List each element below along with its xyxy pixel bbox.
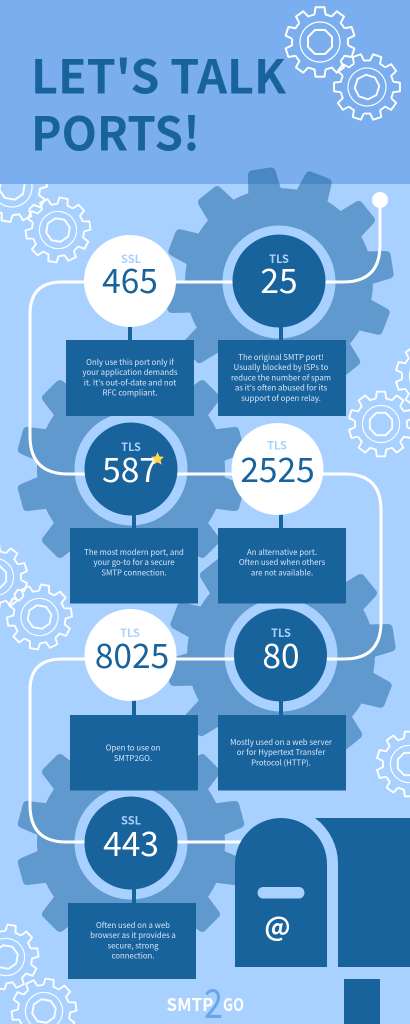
panel: port 25 text: The original SMTP port! [238, 352, 324, 363]
node: port 25 [232, 234, 326, 328]
panel: port 25 text [218, 340, 346, 416]
node: port 443: SSL [121, 812, 141, 828]
icon: small gear bottom left [0, 919, 45, 995]
panel: port 25 text: reduce the number of spam [231, 372, 331, 384]
icon: small gear left edge [0, 544, 29, 610]
node: port 587: 587 [102, 443, 158, 492]
panel: port 443 text: browser as it provides a [90, 930, 176, 941]
route start dot [372, 192, 388, 208]
panel: port 465 text: it. It's out-of-date and not [84, 378, 176, 388]
logo [166, 972, 244, 1024]
node: port 465 [84, 235, 176, 327]
node: port 443 [84, 796, 178, 890]
connector route [30, 200, 381, 842]
panel: port 587 text: SMTP connection. [101, 568, 167, 578]
icon: small gear left upper [19, 192, 97, 268]
mailbox slot [258, 887, 304, 898]
header band [0, 0, 410, 184]
node: port 8025: 8025 [95, 629, 169, 678]
title [31, 40, 287, 164]
icon: header gear two [324, 45, 410, 129]
node: port 587: TLS [121, 439, 141, 455]
stems [128, 325, 283, 904]
mailbox [235, 818, 410, 1024]
node: port 80 [234, 608, 327, 702]
icon: star [151, 452, 164, 465]
panel: port 80 text [218, 715, 346, 790]
panel: port 8025 text [70, 715, 198, 790]
node: port 2525 [232, 423, 324, 515]
panel: port 80 text: Mostly used on a web server [230, 737, 333, 748]
panel: port 25 text: as it's often abused for its [235, 382, 327, 394]
panel: port 443 text [68, 903, 196, 979]
icon: small gear right lower [375, 731, 410, 797]
panel: port 465 text: RFC compliant. [102, 388, 158, 398]
panel: port 2525 text: An alternative port. [247, 547, 317, 558]
panel: port 80 text: or for Hypertext Transfer [237, 747, 326, 758]
panel: port 80 text: Protocol (HTTP). [251, 758, 311, 768]
icon: small gear bottom [5, 973, 83, 1024]
panel: port 587 text [70, 528, 198, 604]
icon: header gear one [283, 7, 357, 77]
node: port 443: 443 [103, 817, 159, 866]
panel: port 25 text: Usually blocked by ISPs to [234, 362, 329, 373]
mailbox body [315, 818, 410, 967]
panel: port 2525 text [218, 528, 346, 604]
node: port 25: TLS [269, 251, 289, 267]
panel: port 25 text: support of open relay. [241, 393, 321, 404]
logo: GO [223, 992, 244, 1017]
panel: port 465 text: your application demands [82, 367, 178, 378]
panel: port 8025 text: SMTP2GO. [114, 753, 152, 764]
panel: port 443 text: secure, strong [107, 940, 159, 952]
icon: small gear right edge [394, 343, 410, 409]
node: port 8025 [84, 609, 176, 701]
node: port 465: 465 [102, 254, 158, 303]
icon: small gear top left [0, 146, 54, 228]
panel: port 465 text: Only use this port only if [86, 357, 174, 368]
panel: port 465 text [66, 340, 194, 416]
panel: port 587 text: The most modern port, and [84, 547, 184, 558]
panel: port 2525 text: Often used when others [239, 557, 325, 568]
gear hub rings [74, 226, 338, 900]
panel: port 443 text: Often used on a web [96, 920, 170, 931]
panel: port 587 text: your go-to for a secure [93, 557, 175, 568]
panel: port 8025 text: Open to use on [106, 742, 161, 754]
icon: small gear right [347, 391, 410, 457]
node: port 465: SSL [121, 251, 141, 267]
node: port 2525: 2525 [240, 443, 315, 492]
title: LET'S TALK [31, 40, 287, 108]
mailbox door [235, 818, 327, 967]
node: port 25: 25 [260, 254, 298, 303]
node: port 2525: TLS [267, 438, 287, 454]
node: port 80: TLS [271, 625, 291, 641]
panel: port 2525 text: are not available. [251, 568, 313, 578]
node: port 587 [84, 422, 178, 516]
icon: at sign: @ [264, 907, 291, 944]
node: port 8025: TLS [120, 625, 140, 641]
title: PORTS! [31, 98, 200, 164]
logo: SMTP [166, 992, 214, 1017]
mailbox post [344, 979, 380, 1024]
node: port 80: 80 [262, 629, 300, 678]
panel: port 443 text: connection. [112, 950, 154, 962]
icon: small gear left middle [0, 579, 79, 655]
